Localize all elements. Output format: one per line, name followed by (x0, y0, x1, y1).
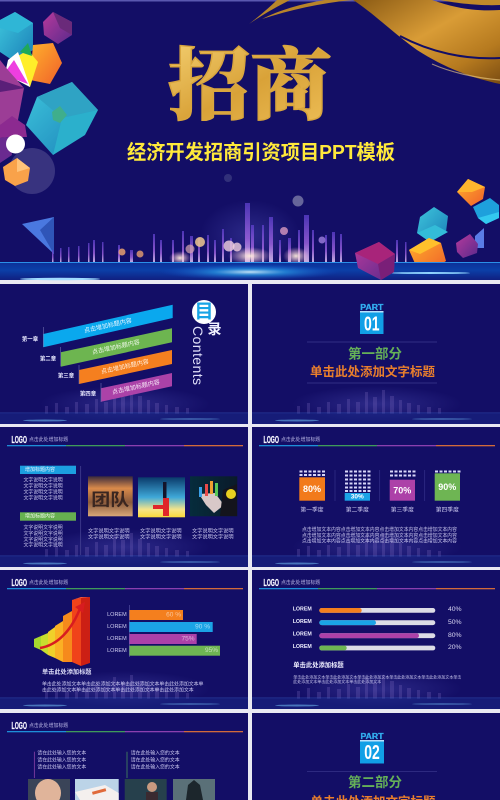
text column 1 (34, 750, 86, 778)
heading: 第一部分: 第一部分 (348, 346, 402, 362)
captions: 文字说明文字说明 (192, 532, 234, 540)
subheading: 单击此处添加文字标题 (310, 364, 435, 379)
chapter labels: 第一章 (22, 335, 39, 343)
panel: cover slide (0, 0, 500, 280)
icon: blue triangle (22, 217, 54, 254)
text column 2: 请在此处输入您的文本 (131, 756, 180, 764)
photo: man in suit (173, 779, 215, 800)
chapter labels: 第四章 (80, 390, 97, 398)
chapter bar 4: 点击增加标题内容 (111, 378, 161, 396)
left text blocks: 增加标题内容 (25, 466, 55, 473)
photo: 团队 blocks (88, 476, 133, 516)
progress bar chart: LOREM (293, 606, 312, 612)
description text: 点击增加文本内容点击增加文本内容点击增加文本内容点击增加文本内容 (302, 532, 457, 539)
icon: right cube cluster (409, 179, 499, 272)
horizontal bar chart: 60 % (166, 612, 181, 618)
horizontal bar chart: LOREM (107, 612, 127, 618)
slide header (259, 434, 495, 446)
quarter 4 block: 第四季度 (436, 505, 459, 513)
chapter bar 4 (101, 373, 172, 402)
slide header (7, 720, 243, 732)
heading: 目录 Contents: 目 (194, 302, 214, 322)
horizontal bar chart: 75% (181, 636, 195, 642)
photo: rainbow hand (190, 476, 237, 516)
left text blocks: 增加标题内容 (25, 512, 55, 520)
chapter bar 1 (43, 305, 173, 347)
chart title: 单击此处添加标题 (42, 668, 92, 676)
horizontal bar chart: LOREM (107, 648, 127, 654)
left text blocks: 文字说明文字说明 (24, 488, 63, 496)
panel: progress bars slide (252, 570, 500, 709)
left text blocks: 文字说明文字说明 (24, 542, 63, 548)
description text: 点击增加文本内容点击增加文本内容点击增加文本内容点击增加文本内容 (302, 538, 457, 544)
chapter labels: 第二章 (40, 354, 57, 362)
icon: large purple cube (355, 242, 395, 280)
panel: text and photos slide (0, 713, 248, 800)
slide header (259, 577, 495, 589)
quarter 2 block (345, 470, 370, 513)
chapter labels: 第三章 (58, 372, 75, 380)
progress bar chart: 20% (448, 644, 462, 651)
text column 1: 请在此处输入您的文本 (37, 756, 86, 764)
icon: part 02 badge: 02 (364, 742, 380, 764)
quarter 4 block: 90% (438, 482, 456, 492)
heading: 第二部分: 第二部分 (348, 774, 402, 790)
panel: section 02 slide (252, 713, 500, 800)
photo: red step figure (138, 477, 185, 517)
progress bar chart: 50% (448, 619, 462, 626)
left text blocks: 文字说明文字说明 (24, 524, 63, 531)
chart title: 单击此处添加标题 (293, 660, 344, 669)
photo: 团队 blocks: 团队 (91, 490, 129, 510)
left text blocks: 文字说明文字说明 (24, 536, 63, 543)
subtitle: 经济开发招商引资项目PPT模板 (127, 140, 395, 164)
quarter 1 block: 80% (303, 484, 321, 494)
captions: 文字说明文字说明 (88, 526, 130, 534)
photo: business person (28, 779, 70, 800)
photo: signing documents (75, 779, 119, 800)
left text blocks: 文字说明文字说明 (24, 530, 63, 537)
icon: left cube cluster (0, 12, 98, 194)
quarter 4 block (435, 470, 460, 513)
description text (293, 674, 461, 684)
quarter 1 block (299, 470, 325, 513)
slide header (7, 577, 243, 589)
horizontal bar chart: LOREM (107, 636, 127, 642)
chapter bar 1: 点击增加标题内容 (83, 316, 133, 335)
captions: 文字说明文字说明 (140, 532, 182, 540)
heading: 目录 Contents: Contents (190, 326, 206, 385)
horizontal bar chart: LOREM (107, 624, 127, 630)
heading: 目录 Contents (190, 300, 222, 385)
progress bar chart: 40% (448, 606, 462, 613)
description text (42, 680, 204, 694)
chapter bar 3 (79, 350, 172, 384)
description text: 此处添加文本单击此处添加文本单击此处添加文本 (293, 678, 381, 684)
progress bar chart (293, 606, 462, 651)
icon: part 02 badge: PART (360, 732, 384, 741)
progress bar chart: LOREM (293, 619, 312, 625)
progress bar chart: LOREM (293, 644, 312, 650)
quarter 3 block: 第三季度 (391, 505, 414, 513)
heading: 目录 Contents: 录 (208, 321, 222, 337)
city skyline illustration (0, 174, 500, 280)
horizontal bar chart: 90 % (195, 624, 210, 630)
quarter 3 block (390, 470, 416, 513)
text column 1: 请在此处输入您的文本 (37, 764, 86, 770)
description text (302, 526, 457, 544)
panel: section 01 slide (252, 284, 500, 424)
title: 招商: 招商 (168, 42, 332, 130)
panel: team slide (0, 427, 248, 567)
chapter bar 3: 点击增加标题内容 (100, 357, 150, 376)
panel: growth chart slide (0, 570, 248, 709)
horizontal bar chart (107, 605, 220, 657)
progress bar chart: 80% (448, 632, 462, 639)
description text: 点击增加文本内容点击增加文本内容点击增加文本内容点击增加文本内容 (302, 526, 457, 533)
chapter bar 2 (61, 328, 172, 367)
quarter 1 block: 第一季度 (300, 505, 324, 513)
icon: part 01 badge (360, 303, 384, 336)
progress bar chart: LOREM (293, 631, 312, 637)
horizontal bar chart: 95% (205, 647, 218, 654)
captions: 文字说明文字说明 (88, 532, 130, 540)
quarter 2 block: 第二季度 (346, 505, 369, 513)
text column 2 (127, 750, 180, 778)
quarter 2 block: 30% (351, 494, 364, 500)
description text: 单击此处添加文本单击此处添加文本单击此处添加文本单击此处添加文本单 (42, 680, 204, 688)
left text blocks: 文字说明文字说明 (24, 482, 63, 490)
left text blocks: 文字说明文字说明 (24, 494, 63, 502)
description text: 单击此处添加文本单击此处添加文本单击此处添加文本单击此处添加文本单击此处添加文本单击 (293, 674, 461, 680)
text column 2: 请在此处输入您的文本 (131, 764, 180, 770)
gold ribbon (249, 0, 500, 84)
slide header (7, 434, 243, 446)
3D growth bar chart with arrow (34, 597, 90, 666)
panel: quarterly slide (252, 427, 500, 567)
captions: 文字说明文字说明 (140, 526, 182, 534)
icon: part 01 badge: PART (360, 303, 383, 312)
chapter bar 2: 点击增加标题内容 (91, 338, 141, 356)
captions: 文字说明文字说明 (192, 526, 234, 534)
photo: woman with network icons (125, 779, 167, 800)
captions (88, 526, 234, 540)
text column 2: 请在此处输入您的文本 (131, 750, 180, 756)
chapter labels (22, 335, 97, 398)
icon: part 01 badge: 01 (364, 314, 380, 336)
left text blocks: 文字说明文字说明 (24, 476, 63, 484)
left text blocks (20, 466, 76, 548)
panel: contents slide (0, 284, 248, 424)
quarter 3 block: 70% (393, 486, 411, 496)
icon: part 02 badge (360, 732, 384, 764)
description text: 击此处添加文本单击此处添加文本单击此处添加文本单击此处添加文本 (42, 686, 194, 694)
text column 1: 请在此处输入您的文本 (37, 750, 86, 756)
